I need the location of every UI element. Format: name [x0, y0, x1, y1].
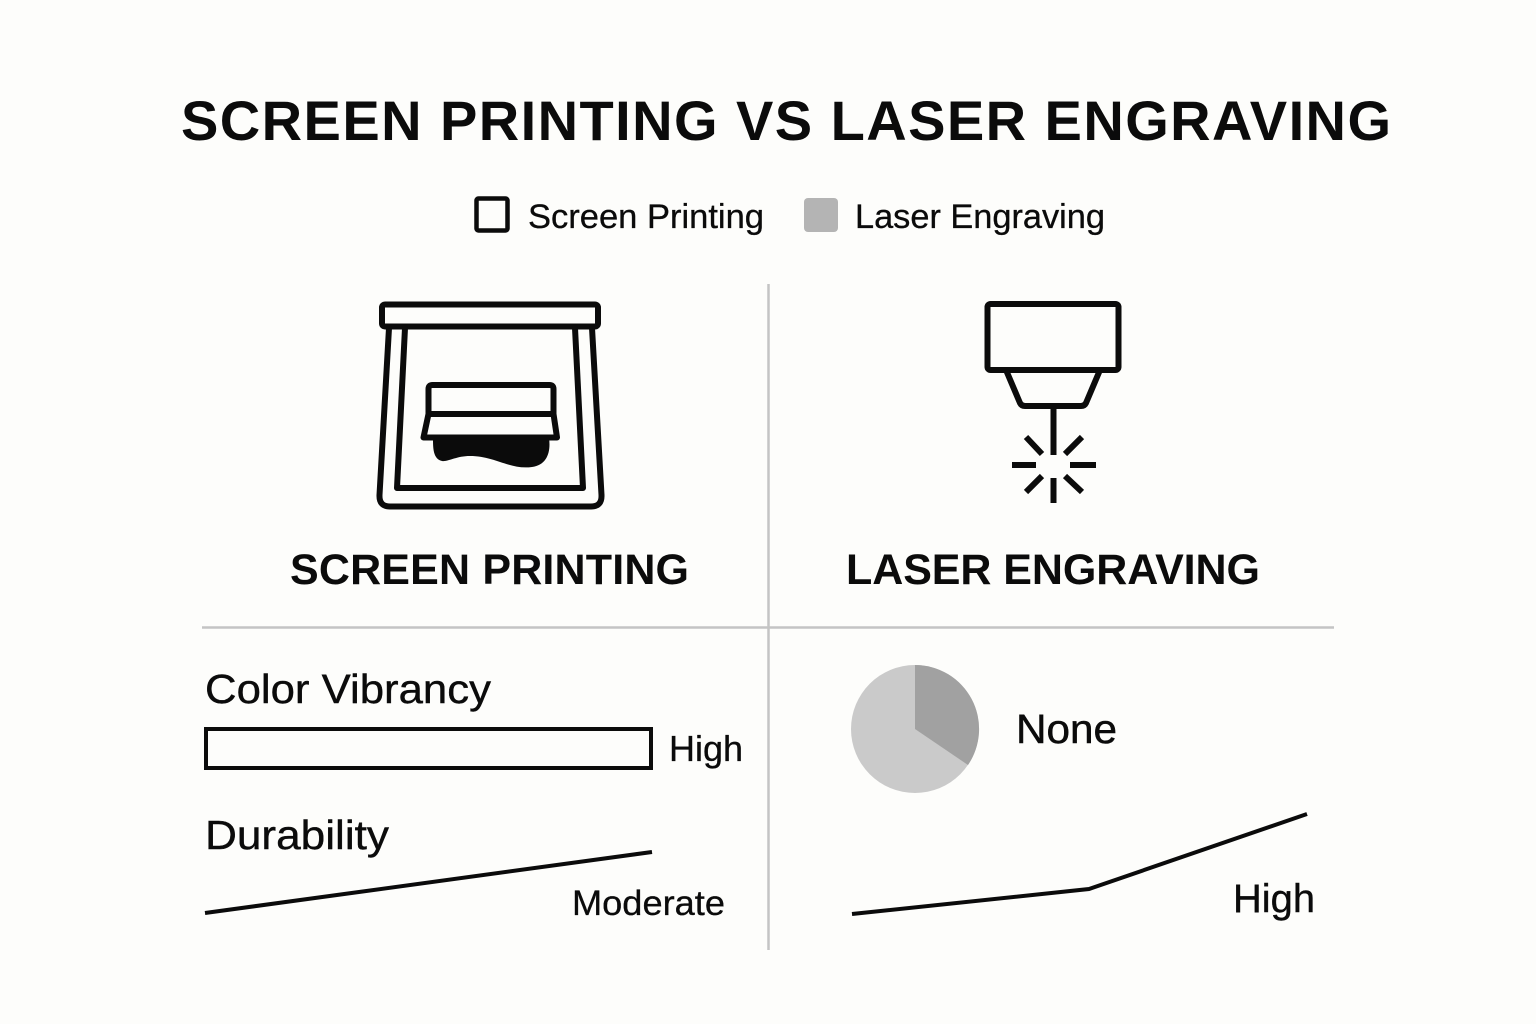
legend swatch: laser engraving: [804, 198, 838, 232]
label: color vibrancy: Color Vibrancy: [205, 666, 492, 712]
legend: [476, 198, 1105, 236]
heading: laser engraving: LASER ENGRAVING: [846, 546, 1260, 594]
heading: screen printing: SCREEN PRINTING: [290, 546, 689, 594]
legend label: screen printing: Screen Printing: [528, 198, 764, 236]
legend label: laser engraving: Laser Engraving: [855, 198, 1105, 236]
line: laser engraving durability: [852, 814, 1307, 914]
value: none: None: [1016, 706, 1117, 752]
value: durability high: High: [1233, 877, 1315, 921]
label: durability: Durability: [205, 812, 390, 858]
title: SCREEN PRINTING VS LASER ENGRAVING: [181, 89, 1391, 152]
icon: screen printing frame and squeegee: [379, 304, 602, 506]
line: screen printing durability: [205, 852, 652, 913]
value: durability moderate: Moderate: [572, 884, 725, 923]
pie chart: [851, 665, 979, 793]
legend swatch: screen printing: [476, 198, 508, 230]
bar: color vibrancy: [206, 729, 651, 768]
value: color vibrancy high: High: [669, 728, 743, 769]
icon: laser head with spark: [988, 304, 1118, 503]
